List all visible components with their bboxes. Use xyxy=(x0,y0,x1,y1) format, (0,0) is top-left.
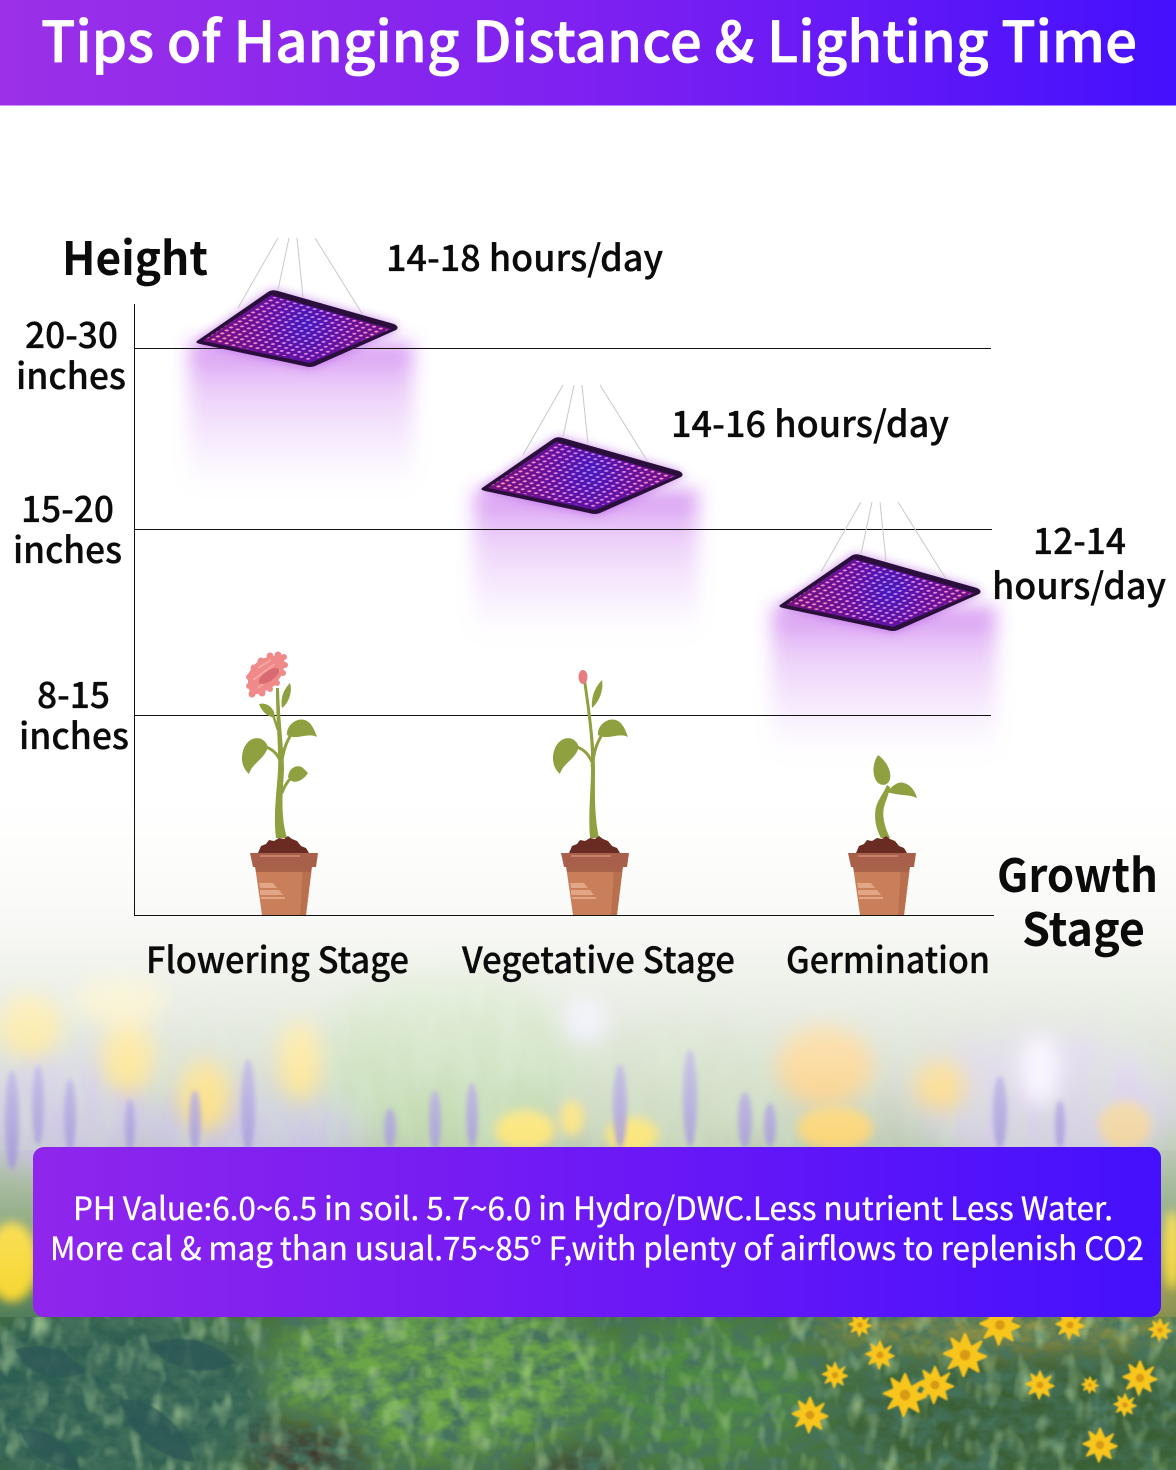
light glow: flowering stage lamp xyxy=(189,343,413,490)
x-axis title: Stage xyxy=(1022,894,1145,960)
x-axis title: Growth xyxy=(997,840,1158,906)
chart axes and height gridlines xyxy=(134,304,994,916)
lighting time: flowering: 14-18 hours/day xyxy=(386,230,663,282)
title: Tips of Hanging Distance & Lighting Time xyxy=(41,0,1137,79)
height label: 15-20 inches: 15-20 xyxy=(21,481,114,533)
lighting time: germination: 12-14 xyxy=(1033,513,1126,565)
light glow: vegetative stage lamp xyxy=(474,490,698,637)
y-axis title: Height xyxy=(62,223,208,289)
lighting time: germination: hours/day xyxy=(992,558,1166,610)
foliage strip at the bottom of the page xyxy=(0,1317,1176,1470)
height label: 20-30 inches: inches xyxy=(16,348,126,400)
grow light: 8-15 inches xyxy=(773,502,988,639)
callout text: More cal & mag than usual.75~85° F,with plenty of airflows to replenish CO2 xyxy=(50,1224,1144,1270)
x-axis title xyxy=(997,840,1158,960)
grow light: 20-30 inches xyxy=(190,238,405,375)
callout panel: growing conditions xyxy=(33,1147,1161,1317)
height label: 8-15 inches: inches xyxy=(19,708,129,760)
stage label: vegetative: Vegetative Stage xyxy=(461,932,735,984)
height label: 15-20 inches: inches xyxy=(13,522,122,574)
height label: 8-15 inches: 8-15 xyxy=(37,667,110,719)
light glow: germination lamp xyxy=(772,607,996,757)
plant: vegetative stage xyxy=(553,670,629,915)
height label: 20-30 inches xyxy=(16,307,126,400)
height label: 20-30 inches: 20-30 xyxy=(25,307,118,359)
plant: germination xyxy=(848,755,917,915)
grow light: 15-20 inches xyxy=(475,385,690,522)
callout text: PH Value:6.0~6.5 in soil. 5.7~6.0 in Hydro/DWC.Less nutrient Less Water. xyxy=(73,1184,1113,1230)
height label: 8-15 inches xyxy=(19,667,129,760)
height label: 15-20 inches xyxy=(13,481,122,574)
plant: flowering stage xyxy=(242,652,318,915)
stage label: flowering: Flowering Stage xyxy=(146,932,409,984)
lighting time: vegetative: 14-16 hours/day xyxy=(671,396,949,448)
callout text xyxy=(50,1184,1144,1270)
stage label: germination: Germination xyxy=(786,932,990,984)
header band xyxy=(0,0,1176,106)
lighting time: germination xyxy=(992,513,1166,610)
